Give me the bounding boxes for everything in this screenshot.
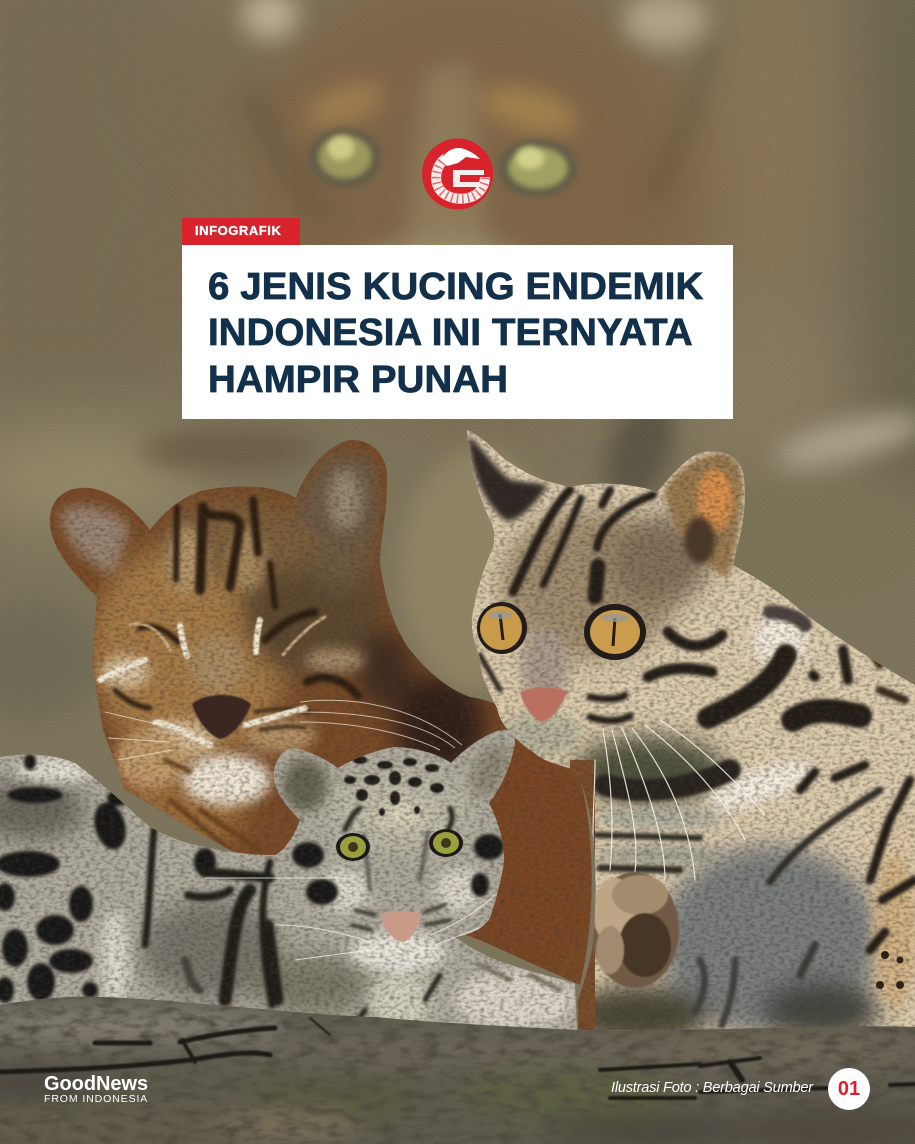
title panel: INDONESIA INI TERNYATA xyxy=(208,311,693,354)
clouded leopard eyes xyxy=(336,829,463,861)
marbled cat eyes xyxy=(477,602,646,660)
golden cat nose xyxy=(192,695,251,739)
label: INFOGRAFIK xyxy=(182,218,300,245)
cat: Asian golden cat xyxy=(40,430,600,990)
cat: clouded leopard xyxy=(0,725,580,1035)
page number badge xyxy=(828,1068,870,1110)
page number badge: 01 xyxy=(838,1078,860,1100)
title panel: 6 JENIS KUCING ENDEMIK xyxy=(208,264,703,308)
brand: GoodNews From Indonesia: FROM INDONESIA xyxy=(44,1093,148,1105)
title panel xyxy=(182,245,733,419)
wooden log xyxy=(0,990,915,1144)
brand: GoodNews From Indonesia: GoodNews xyxy=(44,1073,148,1095)
title panel: HAMPIR PUNAH xyxy=(208,358,508,400)
cat: marbled leopard cat xyxy=(460,425,915,1045)
brand: GoodNews From Indonesia xyxy=(44,1073,148,1105)
label: INFOGRAFIK: INFOGRAFIK xyxy=(195,223,281,238)
photo credit: Ilustrasi Foto : Berbagai Sumber xyxy=(611,1079,813,1096)
marbled cat paw xyxy=(591,872,679,988)
